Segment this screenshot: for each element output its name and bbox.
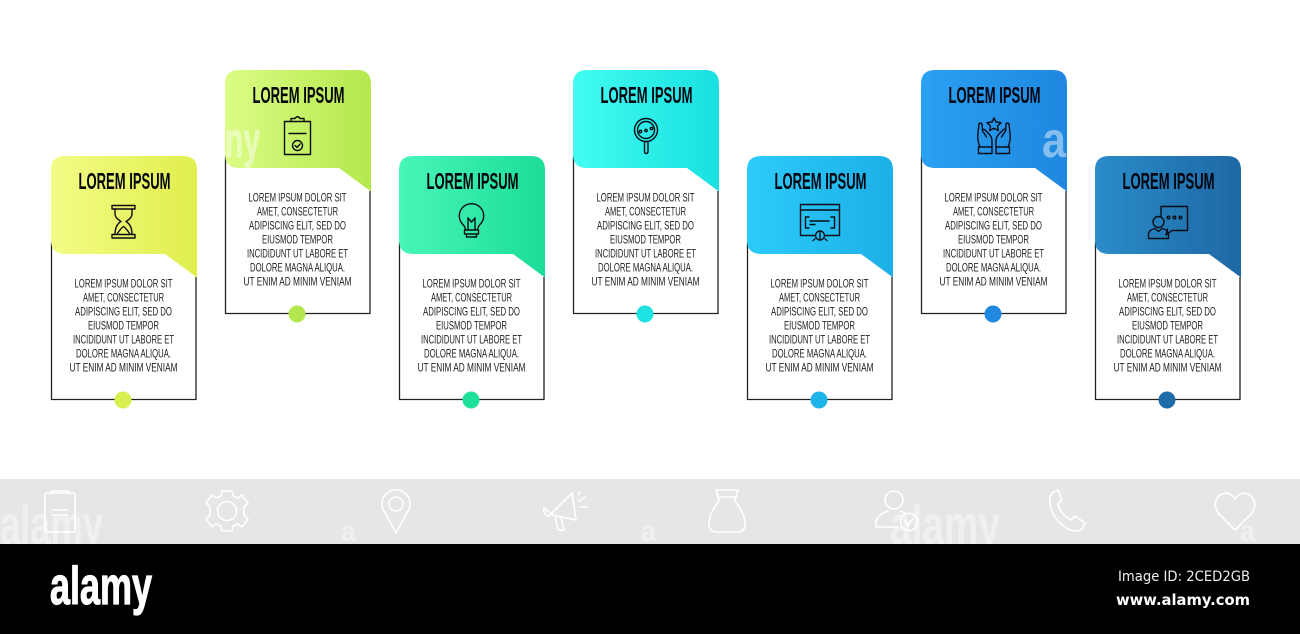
- body text: AMET, CONSECTETUR: [83, 290, 164, 304]
- marker dot: [984, 306, 1002, 322]
- body text: EIUSMOD TEMPOR: [610, 232, 681, 246]
- body text: UT ENIM AD MINIM VENIAM: [244, 274, 351, 288]
- body text: UT ENIM AD MINIM VENIAM: [940, 274, 1047, 288]
- body text: UT ENIM AD MINIM VENIAM: [418, 360, 525, 374]
- body text: LOREM IPSUM DOLOR SIT: [944, 190, 1043, 204]
- icon: light bulb: [459, 204, 484, 237]
- image id: Image ID: 2CED2GB: [1118, 569, 1250, 585]
- body text: UT ENIM AD MINIM VENIAM: [70, 360, 177, 374]
- body text: DOLORE MAGNA ALIQUA.: [946, 260, 1041, 274]
- body text: [1114, 276, 1222, 374]
- band watermark: a: [341, 515, 356, 548]
- body text: DOLORE MAGNA ALIQUA.: [772, 346, 867, 360]
- body text: DOLORE MAGNA ALIQUA.: [1120, 346, 1215, 360]
- band watermark: [0, 493, 1255, 556]
- body text: LOREM IPSUM DOLOR SIT: [248, 190, 347, 204]
- body text: INCIDIDUNT UT LABORE ET: [421, 332, 522, 346]
- watermark on cards: ny: [225, 112, 260, 168]
- band watermark: a: [1240, 515, 1255, 548]
- website: www.alamy.com: [1116, 591, 1250, 609]
- body text: ADIPISCING ELIT, SED DO: [75, 304, 172, 318]
- body text: AMET, CONSECTETUR: [1127, 290, 1208, 304]
- body text: EIUSMOD TEMPOR: [784, 318, 855, 332]
- body text: INCIDIDUNT UT LABORE ET: [943, 246, 1044, 260]
- icon: certificate: [800, 204, 840, 240]
- icon: magnifier: [634, 118, 658, 154]
- heading: LOREM IPSUM: [426, 168, 518, 194]
- gray icon band: [0, 479, 1300, 556]
- body text: [418, 276, 526, 374]
- body text: UT ENIM AD MINIM VENIAM: [766, 360, 873, 374]
- card 2: clipboard: [225, 70, 371, 322]
- body text: [244, 190, 352, 288]
- alamy logo: alamy: [50, 557, 152, 616]
- icon: clipboard outline: [45, 491, 75, 532]
- icon: gear: [206, 491, 248, 531]
- body text: DOLORE MAGNA ALIQUA.: [598, 260, 693, 274]
- body text: ADIPISCING ELIT, SED DO: [1119, 304, 1216, 318]
- band watermark: alamy: [0, 493, 103, 556]
- body text: DOLORE MAGNA ALIQUA.: [424, 346, 519, 360]
- body text: AMET, CONSECTETUR: [605, 204, 686, 218]
- card 4: magnifier: [573, 70, 719, 322]
- heading: LOREM IPSUM: [78, 168, 170, 194]
- body text: AMET, CONSECTETUR: [257, 204, 338, 218]
- body text: EIUSMOD TEMPOR: [1132, 318, 1203, 332]
- body text: INCIDIDUNT UT LABORE ET: [595, 246, 696, 260]
- icon: heart: [1215, 493, 1255, 530]
- body text: DOLORE MAGNA ALIQUA.: [250, 260, 345, 274]
- body text: LOREM IPSUM DOLOR SIT: [422, 276, 521, 290]
- body text: EIUSMOD TEMPOR: [88, 318, 159, 332]
- icon: clipboard: [284, 117, 310, 154]
- body text: AMET, CONSECTETUR: [779, 290, 860, 304]
- band watermark: a: [641, 515, 656, 548]
- body text: [940, 190, 1048, 288]
- body text: EIUSMOD TEMPOR: [958, 232, 1029, 246]
- heading: LOREM IPSUM: [774, 168, 866, 194]
- body text: LOREM IPSUM DOLOR SIT: [74, 276, 173, 290]
- body text: AMET, CONSECTETUR: [953, 204, 1034, 218]
- card 7: person with speech bubble: [1095, 156, 1241, 408]
- marker dot: [1158, 392, 1176, 408]
- body text: EIUSMOD TEMPOR: [436, 318, 507, 332]
- body text: [592, 190, 700, 288]
- body text: [70, 276, 178, 374]
- body text: UT ENIM AD MINIM VENIAM: [592, 274, 699, 288]
- body text: UT ENIM AD MINIM VENIAM: [1114, 360, 1221, 374]
- card 5: certificate: [747, 156, 893, 408]
- body text: EIUSMOD TEMPOR: [262, 232, 333, 246]
- heading: LOREM IPSUM: [252, 82, 344, 108]
- icon: person with speech bubble: [1148, 206, 1188, 238]
- body text: ADIPISCING ELIT, SED DO: [771, 304, 868, 318]
- body text: LOREM IPSUM DOLOR SIT: [1118, 276, 1217, 290]
- icon: megaphone: [544, 492, 587, 530]
- watermark on cards: [225, 112, 1067, 168]
- icon: user with check: [876, 491, 918, 530]
- body text: DOLORE MAGNA ALIQUA.: [76, 346, 171, 360]
- band watermark: alamy: [890, 493, 1000, 556]
- heading: LOREM IPSUM: [600, 82, 692, 108]
- body text: ADIPISCING ELIT, SED DO: [249, 218, 346, 232]
- marker dot: [810, 392, 828, 408]
- icon: money bag: [709, 490, 745, 532]
- body text: LOREM IPSUM DOLOR SIT: [770, 276, 869, 290]
- card 1: hourglass: [51, 156, 197, 408]
- body text: AMET, CONSECTETUR: [431, 290, 512, 304]
- watermark on cards: a: [1042, 112, 1067, 168]
- body text: INCIDIDUNT UT LABORE ET: [1117, 332, 1218, 346]
- icon: map pin: [382, 490, 410, 533]
- heading: LOREM IPSUM: [1122, 168, 1214, 194]
- body text: [766, 276, 874, 374]
- icon: hands and star: [978, 118, 1010, 154]
- card 3: light bulb: [399, 156, 545, 408]
- heading: LOREM IPSUM: [948, 82, 1040, 108]
- body text: ADIPISCING ELIT, SED DO: [597, 218, 694, 232]
- marker dot: [636, 306, 654, 322]
- body text: LOREM IPSUM DOLOR SIT: [596, 190, 695, 204]
- icon: hourglass: [112, 206, 135, 238]
- body text: ADIPISCING ELIT, SED DO: [945, 218, 1042, 232]
- marker dot: [114, 392, 132, 408]
- icon: phone: [1050, 490, 1085, 531]
- card 6: hands and star: [921, 70, 1067, 322]
- footer bar: [0, 544, 1300, 634]
- body text: INCIDIDUNT UT LABORE ET: [247, 246, 348, 260]
- marker dot: [462, 392, 480, 408]
- body text: INCIDIDUNT UT LABORE ET: [73, 332, 174, 346]
- marker dot: [288, 306, 306, 322]
- body text: INCIDIDUNT UT LABORE ET: [769, 332, 870, 346]
- body text: ADIPISCING ELIT, SED DO: [423, 304, 520, 318]
